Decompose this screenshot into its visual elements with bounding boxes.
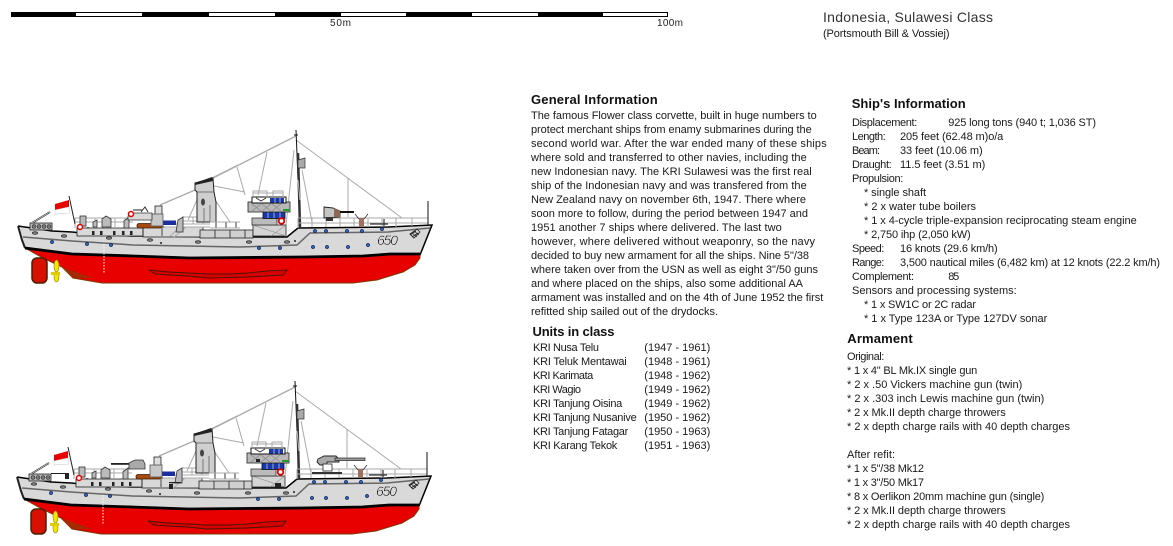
text block: general information: decided to buy new armament for all the ships. Nine 5"/38 [531, 250, 809, 262]
hull number: 650 [376, 483, 397, 499]
list: units in class: KRI Tanjung Nusanive [533, 412, 637, 424]
ship: after refit [17, 381, 431, 534]
text block: ship's information: Draught: [852, 159, 892, 171]
text block: ship's information: Range: [852, 257, 884, 269]
text block: ship's information: Displacement: [852, 117, 917, 129]
list: units in class: KRI Tanjung Fatagar [533, 426, 629, 438]
text block: ship's information: Sensors and processing systems: [852, 285, 1017, 297]
text block: general information: New Zealand navy on november 6th, 1947. There where [531, 194, 806, 206]
list: units in class: KRI Karang Tekok [533, 440, 618, 452]
text block: ship's information: Propulsion: [852, 173, 903, 185]
hull number: 650 [377, 232, 398, 248]
text block: armament: * 2 x depth charge rails with 40 depth charges [847, 519, 1070, 531]
text block: armament: * 2 x Mk.II depth charge throwers [847, 505, 1006, 517]
text block: general information: where sold and transferred to other navies, including the [530, 152, 807, 164]
rigging [159, 387, 401, 476]
list: units in class: (1951 - 1963) [644, 440, 710, 452]
ship: original configuration [18, 130, 432, 283]
text block: general information: soon more to follow, during the period between 1947 and [531, 208, 808, 220]
text block: ship's information: * 2,750 ihp (2,050 kW) [864, 229, 971, 241]
text block: ship's information: Length: [852, 131, 886, 143]
text block: armament: * 2 x Mk.II depth charge throwers [847, 407, 1006, 419]
heading: general information: General Information [531, 92, 658, 107]
text block: ship's information: * 1 x Type 123A or Type 127DV sonar [864, 313, 1048, 325]
list: units in class: KRI Teluk Mentawai [533, 356, 627, 368]
list: units in class: (1948 - 1962) [644, 370, 710, 382]
aft gun tub [128, 207, 152, 220]
list: units in class: KRI Karimata [533, 370, 594, 382]
title: Indonesia, Sulawesi Class [823, 9, 993, 25]
text block: ship's information: Beam: [852, 145, 880, 157]
list: units in class: (1950 - 1963) [644, 426, 710, 438]
text block: armament: * 1 x 3"/50 Mk17 [847, 477, 924, 489]
hull [17, 476, 431, 534]
text block: armament: Original: [847, 351, 884, 363]
list: units in class: (1947 - 1961) [644, 342, 710, 354]
text block: armament: * 1 x 4" BL Mk.IX single gun [847, 365, 977, 377]
text block: general information: however, where delivered without weaponry, so the navy [531, 236, 816, 248]
text block: ship's information: * 1 x 4-cycle triple-expansion reciprocating steam engine [864, 215, 1137, 227]
Oerlikon guns [51, 459, 281, 489]
list: units in class: (1949 - 1962) [644, 384, 710, 396]
subtitle credit: (Portsmouth Bill & Vossiej) [823, 28, 950, 40]
heading: armament: Armament [847, 331, 913, 346]
heading: units in class: Units in class [532, 324, 614, 339]
text block: armament: * 1 x 5"/38 Mk12 [847, 463, 924, 475]
text block: general information: second world war. After the war ended many of these ships [531, 138, 827, 150]
text block: general information: ship of the Indonesian navy and was transfered from the [531, 180, 807, 192]
5 inch gun [312, 456, 365, 474]
text block: ship's information: 205 feet (62.48 m)o/a [900, 131, 1004, 143]
text block: general information: protect merchant ships from enamy submarines during the [531, 124, 812, 136]
heading: ship's information: Ship's Information [852, 96, 966, 111]
text block: armament: * 2 x .303 inch Lewis machine gun (twin) [847, 393, 1044, 405]
scale bar [11, 12, 683, 29]
text block: ship's information: Complement: [852, 271, 914, 283]
list: units in class: KRI Tanjung Oisina [533, 398, 623, 410]
4 inch gun [324, 207, 354, 221]
text block: ship's information: Speed: [852, 243, 884, 255]
hull [18, 225, 432, 283]
text block: general information: refitted ship sailed out of the drydocks. [531, 306, 718, 318]
text block: general information [530, 110, 827, 318]
list: units in class: (1948 - 1961) [644, 356, 710, 368]
superstructure [29, 381, 427, 489]
text block: ship's information: * 1 x SW1C or 2C radar [864, 299, 976, 311]
text block: ship's information: 33 feet (10.06 m) [900, 145, 983, 157]
text block: ship's information: 11.5 feet (3.51 m) [900, 159, 985, 171]
text block: general information: 1951 another 7 ships where delivered. The last two [531, 222, 782, 234]
text block: general information: where taken over from the USN as well as eight 3"/50 guns [530, 264, 818, 276]
text block: ship's information: 16 knots (29.6 km/h) [900, 243, 998, 255]
list: units in class: (1949 - 1962) [644, 398, 710, 410]
text block: general information: armament was installed and on the 4th of June 1952 the first [531, 292, 823, 304]
text block: armament [847, 351, 1070, 531]
text block: general information: and where placed on the ships, also some additional AA [531, 278, 804, 290]
scale bar: 50m [330, 18, 351, 29]
text block: ship's information: * 2 x water tube boilers [864, 201, 976, 213]
3 inch gun [111, 460, 145, 469]
text block: armament: * 8 x Oerlikon 20mm machine gun (single) [847, 491, 1044, 503]
text block: ship's information [852, 117, 1160, 325]
text block: general information: The famous Flower class corvette, built in huge numbers to [531, 110, 817, 122]
text block: ship's information: 3,500 nautical miles (6,482 km) at 12 knots (22.2 km/h) [900, 257, 1160, 269]
list: units in class: (1950 - 1962) [644, 412, 710, 424]
text block: armament: After refit: [847, 449, 895, 461]
text block: armament: * 2 x depth charge rails with 40 depth charges [847, 421, 1070, 433]
superstructure [30, 130, 428, 238]
list: units in class: KRI Nusa Telu [533, 342, 599, 354]
list: units in class [533, 342, 710, 452]
list: units in class: KRI Wagio [533, 384, 581, 396]
scale bar: 100m [657, 18, 683, 29]
text block: general information: new Indonesian navy. The KRI Sulawesi was the first real [531, 166, 812, 178]
text block: ship's information: * single shaft [864, 187, 926, 199]
text block: ship's information: 925 long tons (940 t; 1,036 ST) [948, 117, 1096, 129]
rigging [160, 136, 402, 225]
text block: ship's information: 85 [948, 271, 959, 283]
text block: armament: * 2 x .50 Vickers machine gun (twin) [847, 379, 1022, 391]
